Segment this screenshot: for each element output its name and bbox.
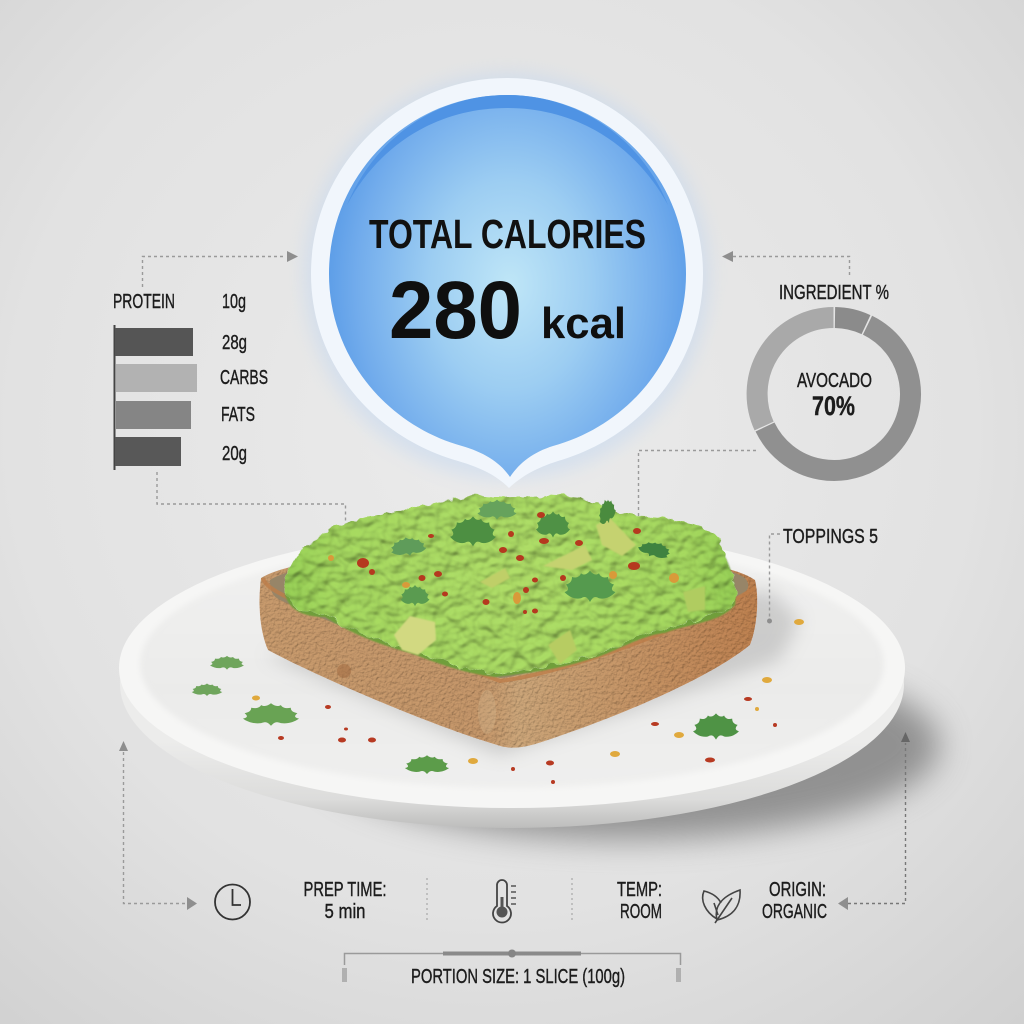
prep time text: 5 min <box>324 901 366 923</box>
value: 280 kcal: kcal <box>541 299 626 348</box>
fats label: FATS <box>221 404 255 426</box>
bar: other <box>115 437 181 466</box>
arrow: right bottom connector <box>838 732 910 910</box>
prep time text: PREP TIME: <box>304 879 386 901</box>
portion size text: PORTION SIZE: 1 SLICE (100g) <box>411 966 625 988</box>
arrow: left bottom connector <box>119 741 197 910</box>
panel: macronutrient bar chart <box>113 291 268 470</box>
carbs label: CARBS <box>220 367 268 389</box>
protein value: 10g <box>222 291 246 313</box>
bar: fats <box>116 401 191 429</box>
callout: toppings <box>767 526 878 624</box>
temp text: TEMP: <box>617 879 662 901</box>
callout: toppings: TOPPINGS 5 <box>783 526 878 548</box>
axis <box>114 325 116 470</box>
prep time text <box>304 879 386 923</box>
panel: ingredient donut chart <box>757 282 911 470</box>
connector: bars to toast <box>157 472 346 526</box>
origin text: ORGANIC <box>762 901 827 923</box>
value 28g: 28g <box>222 332 247 354</box>
avocado label: AVOCADO <box>797 370 872 392</box>
temp text <box>617 879 662 923</box>
cilantro on plate <box>192 656 739 774</box>
value 20g: 20g <box>222 443 247 465</box>
bar: protein <box>115 328 193 356</box>
toast shadow on plate <box>265 590 800 755</box>
panel: total calories speech bubble <box>304 73 710 488</box>
cilantro on avocado <box>388 494 676 606</box>
origin text: ORIGIN: <box>769 879 826 901</box>
icon: clock <box>215 884 250 920</box>
value: 280 kcal: 280 <box>389 265 522 356</box>
70% value: 70% <box>812 391 855 421</box>
bar: carbs <box>116 364 197 392</box>
spice flecks on plate <box>252 619 804 784</box>
icon: thermometer <box>493 880 516 922</box>
avocado mash <box>285 495 736 677</box>
toast bread <box>259 550 757 748</box>
connector: donut to toast <box>638 450 756 518</box>
plate <box>119 528 905 828</box>
plate shadow <box>310 650 940 840</box>
icon: leaf <box>703 890 740 923</box>
orange seeds on avocado <box>328 555 679 604</box>
donut ring <box>757 318 911 470</box>
divider right <box>571 878 573 922</box>
origin text <box>762 879 827 923</box>
avocado chunks <box>394 518 705 664</box>
ingredient heading: INGREDIENT % <box>779 282 889 304</box>
heading: total calories: TOTAL CALORIES <box>369 211 646 257</box>
portion size scale <box>342 950 681 988</box>
value: 280 kcal <box>389 265 626 356</box>
arrow: protein to bubble <box>142 251 298 287</box>
protein label: PROTEIN <box>113 291 175 313</box>
chili flakes on avocado <box>357 512 641 614</box>
arrow: ingredient to bubble <box>722 251 850 277</box>
temp text: ROOM <box>620 901 662 923</box>
divider left <box>426 878 428 922</box>
